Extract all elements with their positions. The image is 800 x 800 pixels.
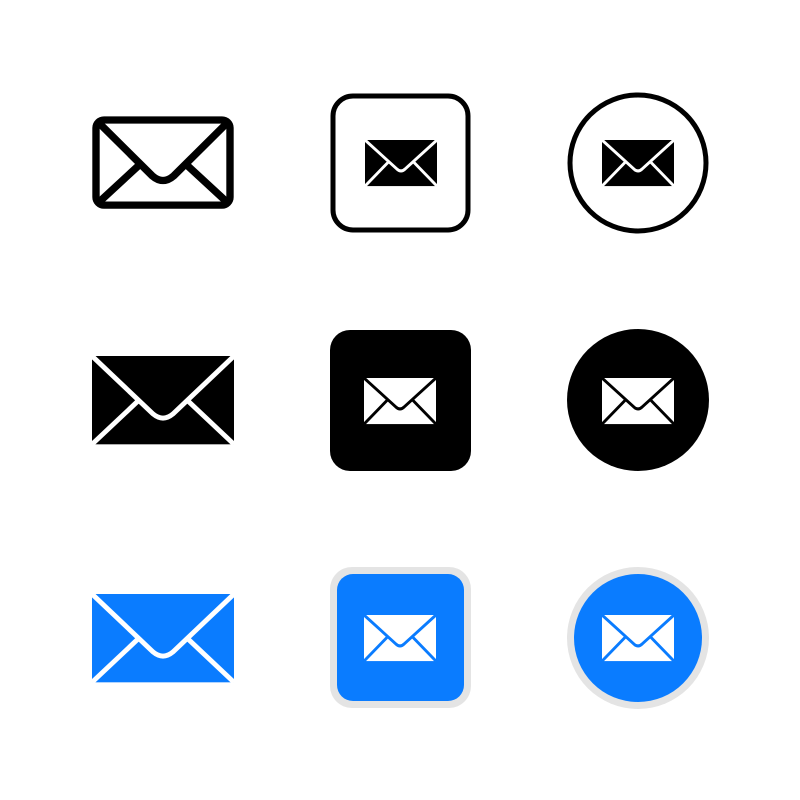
icon: envelope in black rounded square bbox=[330, 330, 471, 471]
icon: filled black envelope bbox=[92, 356, 234, 444]
icon: filled blue envelope bbox=[92, 594, 234, 682]
icon: outline envelope bbox=[96, 120, 230, 205]
icon: envelope in outline circle bbox=[570, 95, 706, 231]
icon: envelope in blue circle bbox=[567, 567, 709, 709]
icon: envelope in black circle bbox=[567, 329, 709, 471]
icon: envelope in blue rounded square bbox=[330, 567, 471, 708]
icon: envelope in outline rounded square bbox=[333, 96, 468, 230]
